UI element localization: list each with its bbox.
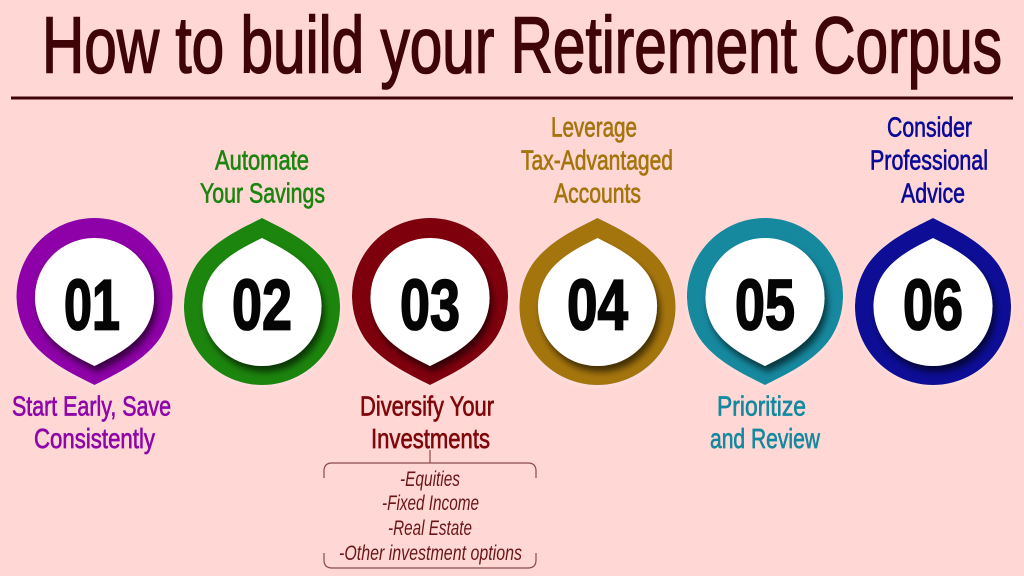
step 05: teal drop badge — [687, 218, 843, 385]
step 01 label — [12, 390, 171, 454]
investment options list: -Other investment options — [339, 541, 522, 565]
step 06: blue drop badge — [855, 218, 1011, 385]
investment options list — [339, 467, 522, 565]
step 03 label: Diversify Your — [360, 390, 494, 422]
step 03: maroon drop badge: 03 — [400, 266, 460, 346]
step 03: maroon drop badge — [352, 218, 508, 385]
step 04: ochre drop badge — [519, 218, 676, 385]
step 05 label: Prioritize — [717, 390, 806, 422]
step 06: blue drop badge: 06 — [903, 266, 963, 346]
step 04: ochre drop badge: 04 — [567, 266, 628, 346]
step 02: green drop badge: 02 — [232, 266, 292, 346]
step 05 label: and Review — [710, 423, 820, 454]
step 02: green drop badge — [184, 218, 340, 385]
step 04 label: Accounts — [554, 178, 641, 208]
step 01 label: Consistently — [34, 423, 155, 454]
step 06 label: Advice — [901, 178, 965, 208]
title underline — [11, 96, 1013, 100]
step 06 label — [870, 112, 988, 208]
investment options list: -Fixed Income — [382, 491, 479, 515]
step 06 label: Professional — [870, 144, 988, 176]
step 01 label: Start Early, Save — [12, 390, 171, 422]
step 05: teal drop badge: 05 — [735, 266, 795, 346]
step 05 label — [710, 390, 820, 454]
step 01: purple drop badge — [16, 218, 173, 385]
step 02 label — [200, 144, 325, 208]
step 03 label — [360, 390, 494, 454]
step 02 label: Automate — [215, 144, 309, 176]
investment options list: -Equities — [400, 467, 460, 491]
step 04 label — [521, 112, 673, 208]
step 06 label: Consider — [887, 112, 972, 142]
investment options bracket — [324, 450, 536, 568]
step 02 label: Your Savings — [200, 178, 325, 208]
step 01: purple drop badge: 01 — [64, 266, 120, 346]
investment options list: -Real Estate — [388, 516, 472, 540]
step 04 label: Leverage — [551, 112, 637, 142]
step 03 label: Investments — [371, 423, 490, 454]
step 04 label: Tax-Advantaged — [521, 144, 673, 176]
